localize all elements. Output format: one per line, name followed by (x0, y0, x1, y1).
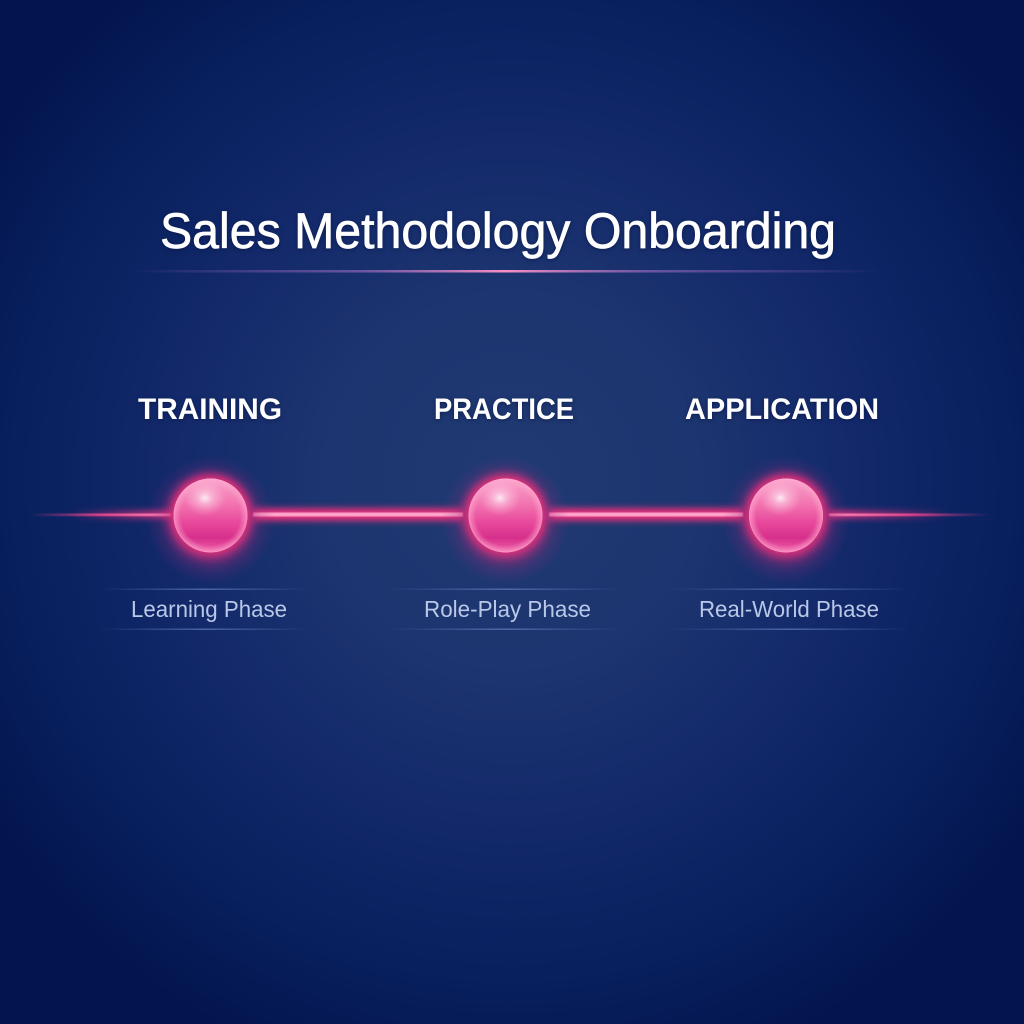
phase caption: real-world phase: Real-World Phase (699, 596, 879, 622)
title underline (130, 270, 880, 272)
phase caption: role-play phase: Role-Play Phase (424, 596, 591, 622)
stage labels (138, 393, 879, 426)
label: training: TRAINING (138, 393, 282, 426)
label: practice: PRACTICE (434, 393, 574, 426)
node: application sphere (722, 456, 850, 584)
node: training sphere (146, 456, 274, 584)
title: Sales Methodology Onboarding (160, 203, 836, 259)
node: practice sphere (442, 456, 570, 584)
timeline connector lines (30, 508, 990, 520)
phase caption: learning phase: Learning Phase (131, 596, 287, 622)
label: application: APPLICATION (685, 393, 879, 426)
